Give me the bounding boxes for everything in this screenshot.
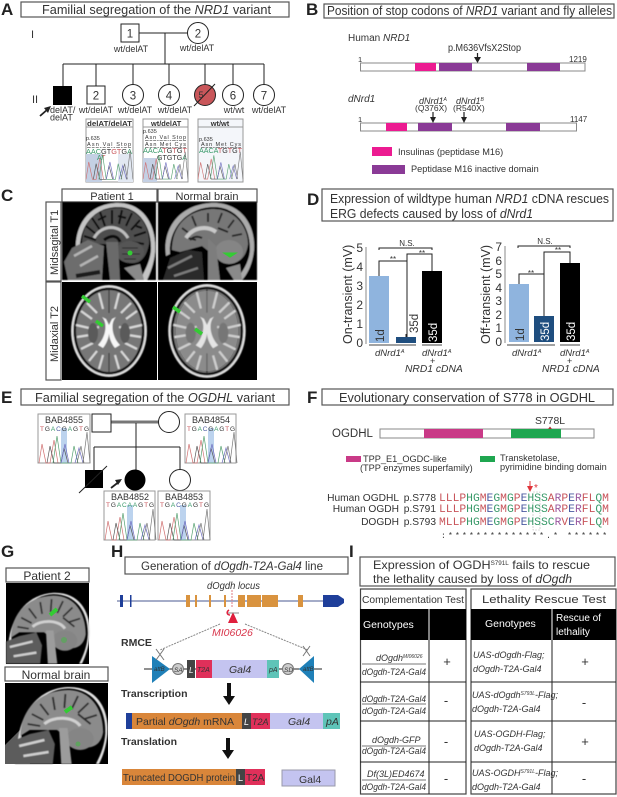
chart: on-transient: 1 xyxy=(356,317,363,331)
proband E xyxy=(111,470,146,490)
sequence alignment: LLLPHGMEGMGPEHSSARPERFLQM xyxy=(439,504,609,516)
lethality rescue table: S793L xyxy=(521,691,535,697)
chromatogram wt/delAT: GTGTGA xyxy=(157,155,187,162)
panel: D ERG rescue charts xyxy=(307,189,613,375)
individual II-2: 2 xyxy=(93,90,99,102)
mRNA bar: L xyxy=(244,717,249,727)
panel: E familial segregation of OGDHL xyxy=(1,388,289,540)
chromatogram wt/delAT: AACATGTGT xyxy=(143,148,188,155)
Gal4 bar: Gal4 xyxy=(299,774,321,786)
mRNA bar: Gal4 xyxy=(288,716,310,728)
MRI normal axial xyxy=(158,282,257,380)
translation step xyxy=(121,736,234,759)
chart: on-transient: A xyxy=(447,349,452,355)
individual II-3 xyxy=(117,84,153,115)
gene locus xyxy=(117,581,344,607)
chromatogram wt/wt: Asn Met Cys xyxy=(201,142,241,148)
MRI normal midsagittal xyxy=(158,202,257,280)
normal brain MRI: Normal brain xyxy=(22,668,90,682)
complementation table: dOgdh-T2A-Gal4 xyxy=(362,667,426,677)
fly dNrd1 protein: dNrd1 xyxy=(419,96,444,106)
sequence alignment: * xyxy=(534,483,538,494)
chart: on-transient: 1d xyxy=(375,329,387,342)
chromatogram wt/delAT: p.635 xyxy=(143,129,157,135)
complementation table: dOgdh-GFP xyxy=(372,735,421,745)
panel: A familial segregation of NRD1 xyxy=(1,0,289,182)
heading F: Evolutionary conservation of S778 in OGDHL xyxy=(339,390,595,405)
chromatogram delAT/delAT: AT xyxy=(97,155,106,162)
chart: off-transient: + xyxy=(567,356,572,366)
individual I-1: wt/delAT xyxy=(113,44,149,54)
RMCE label and cassette: T2A xyxy=(197,667,210,674)
mother xyxy=(158,412,180,432)
legend F: pyrimidine binding domain xyxy=(500,462,607,472)
chart: off-transient: 6 xyxy=(495,254,502,268)
chart: off-transient: 5 xyxy=(495,267,502,281)
fly dNrd1 protein: (R540X) xyxy=(453,103,485,113)
panel letter G: G xyxy=(1,542,14,561)
lethality rescue table: UAS-dOgdh-Flag; xyxy=(473,650,545,660)
translation step: Translation xyxy=(121,736,177,748)
OGDHL protein: OGDHL xyxy=(332,428,374,440)
fly dNrd1 protein: dNrd1 xyxy=(348,94,375,105)
RMCE label and cassette: SA xyxy=(174,667,183,674)
sequence alignment: Human OGDHL xyxy=(327,493,399,504)
individual II-2: wt/delAT xyxy=(78,105,114,115)
panel: G patient 2 MRI xyxy=(1,542,108,764)
MRI row headers xyxy=(46,202,61,380)
individual I-2: 2 xyxy=(195,28,201,40)
individual II-3: 3 xyxy=(130,90,136,102)
complementation table: dOgdh-T2A-Gal4 xyxy=(362,782,426,792)
chart: on-transient: NRD1 cDNA xyxy=(405,364,463,375)
sequence alignment: :**************.* ****** xyxy=(441,532,607,541)
complementation table: dOgdh-T2A-Gal4 xyxy=(362,694,426,704)
panel letter D: D xyxy=(307,190,319,209)
complementation table: Complementation Test xyxy=(362,594,464,606)
chromatogram delAT/delAT: p.635 xyxy=(86,136,100,142)
heading D xyxy=(322,189,613,221)
lethality rescue table: lethality xyxy=(556,627,590,638)
fly dNrd1 protein: 1 xyxy=(358,115,362,124)
proband II-1: delAT xyxy=(50,112,73,122)
chromatogram BAB4853: BAB4853 xyxy=(165,492,203,502)
chromatogram wt/delAT: Asn Met Cys xyxy=(145,142,186,148)
panel: F evolutionary conservation xyxy=(307,388,613,541)
MRI row headers: Midsagital T1 xyxy=(49,210,61,275)
panel letter I: I xyxy=(349,542,354,561)
chromatogram BAB4852: BAB4852 xyxy=(111,492,149,502)
chart: on-transient: On-transient (mV) xyxy=(341,245,355,344)
heading I: S791L xyxy=(491,561,509,567)
complementation table: dOgdh-T2A-Gal4 xyxy=(362,706,426,716)
individual II-4: 4 xyxy=(166,90,173,102)
chart: off-transient: Off-transient (mV) xyxy=(479,245,493,344)
panel letter A: A xyxy=(1,0,13,19)
legend B xyxy=(372,147,539,174)
chart: on-transient xyxy=(341,239,463,375)
chart: on-transient: dNrd1 xyxy=(375,348,401,359)
MI06026 insertion: MI06026 xyxy=(212,627,253,639)
lethality rescue table: Lethality Rescue Test xyxy=(482,594,606,606)
chart: off-transient: ** xyxy=(555,246,561,255)
chart: off-transient: 0 xyxy=(495,335,502,349)
individual II-4 xyxy=(157,84,193,115)
complementation table: Genotypes xyxy=(363,619,414,631)
complementation table: + xyxy=(443,654,451,669)
heading I: fails to rescue xyxy=(509,558,590,572)
panel letter H: H xyxy=(111,542,123,561)
RMCE label and cassette: L xyxy=(189,666,193,675)
pedigree E lines xyxy=(94,422,180,470)
truncated protein bar xyxy=(122,769,265,785)
sequence alignment: MLLPHGMEGMGPEHSSCRVERFLQM xyxy=(439,517,609,529)
human NRD1 protein: p.M636VfsX2Stop xyxy=(448,43,521,54)
chart: on-transient: 35d xyxy=(428,323,440,342)
heading D: ERG defects caused by loss of dNrd1 xyxy=(330,206,533,221)
heading H: Generation of dOgdh-T2A-Gal4 line xyxy=(141,561,323,573)
sequence alignment: p.S791 xyxy=(404,504,436,515)
individual I-2 xyxy=(179,22,215,53)
lethality rescue table: -Flag; xyxy=(535,768,558,778)
chromatogram wt/delAT: Asn Val Stop xyxy=(145,135,186,141)
MI06026 insertion xyxy=(212,610,253,639)
chart: off-transient: 7 xyxy=(495,240,502,254)
proband II-1: delAT/ xyxy=(50,105,76,115)
human NRD1 protein: 1 xyxy=(358,55,362,64)
chromatogram BAB4854 xyxy=(185,414,237,463)
heading I xyxy=(360,557,615,586)
chromatogram wt/delAT: wt/delAT xyxy=(150,119,182,128)
lethality rescue table: UAS-OGDH xyxy=(472,768,521,778)
father xyxy=(92,414,111,432)
OGDHL protein xyxy=(332,416,594,440)
lethality rescue table: dOgdh-T2A-Gal4 xyxy=(474,743,543,753)
sequence alignment: p.S778 xyxy=(404,493,436,504)
panel: C MRI grid xyxy=(1,186,257,380)
patient 2 MRI: Patient 2 xyxy=(23,569,71,583)
complementation table: dOgdh-T2A-Gal4 xyxy=(362,746,426,756)
chromatogram delAT/delAT: Asn Val Stop xyxy=(87,142,131,148)
chromatogram wt/wt: AACATGTGT xyxy=(199,148,243,155)
heading I: the lethality caused by loss of dOgdh xyxy=(373,572,572,586)
chromatogram BAB4852 xyxy=(104,491,156,540)
chromatogram delAT/delAT: delAT/delAT xyxy=(87,119,133,128)
RMCE label and cassette: attB xyxy=(154,667,165,673)
heading E: Familial segregation of the OGDHL variant xyxy=(35,390,275,405)
chart: off-transient: 1d xyxy=(515,328,527,341)
chart: on-transient: 4 xyxy=(356,260,363,274)
lethality rescue table: -Flag; xyxy=(535,690,559,700)
RMCE label and cassette xyxy=(121,624,322,683)
MRI patient 1 axial xyxy=(62,282,157,380)
complementation table: - xyxy=(444,693,448,708)
truncated protein bar: T2A xyxy=(246,773,265,784)
chart: on-transient: 35d xyxy=(409,314,421,333)
individual II-6: wt/wt xyxy=(223,105,245,115)
OGDHL protein: S778L xyxy=(535,416,565,427)
MRI column headers: Patient 1 xyxy=(90,191,134,203)
panel letter F: F xyxy=(307,388,317,407)
sequence alignment: p.S793 xyxy=(404,517,436,528)
mRNA bar: pA xyxy=(325,716,339,728)
RMCE label and cassette: pA xyxy=(268,667,278,674)
lethality rescue table: - xyxy=(582,695,586,710)
legend B: Insulinas (peptidase M16) xyxy=(398,147,503,157)
individual II-6: 6 xyxy=(230,90,236,102)
chromatogram delAT/delAT: AACGTGTGA xyxy=(86,149,132,156)
Gal4 bar xyxy=(282,770,335,786)
individual II-3: wt/delAT xyxy=(117,105,153,115)
sister xyxy=(170,470,190,490)
individual II-6 xyxy=(222,84,245,115)
chart: off-transient: dNrd1 xyxy=(560,348,586,359)
chromatogram wt/delAT xyxy=(143,119,188,182)
gene locus: dOgdh locus xyxy=(207,581,260,592)
chart: off-transient: 4 xyxy=(495,281,502,295)
sequence alignment: LLLPHGMEGMGPEHSSARPERFLQM xyxy=(439,493,609,505)
lethality rescue table: Genotypes xyxy=(485,618,536,630)
heading A: Familial segregation of the NRD1 variant xyxy=(42,2,271,17)
MRI column headers: Normal brain xyxy=(176,191,238,203)
chart: off-transient: A xyxy=(537,349,542,355)
truncated protein bar: L xyxy=(238,773,243,783)
individual II-2 xyxy=(78,86,114,115)
fly dNrd1 protein: (Q376X) xyxy=(415,103,447,113)
panel letter C: C xyxy=(1,186,13,205)
panel letter B: B xyxy=(306,0,318,19)
lethality rescue table: dOgdh-T2A-Gal4 xyxy=(472,782,541,792)
MRI row headers: Midaxial T2 xyxy=(49,306,61,362)
chromatogram BAB4854: BAB4854 xyxy=(192,415,230,425)
chart: on-transient: dNrd1 xyxy=(422,348,448,359)
panel: I tables xyxy=(349,542,616,794)
individual I-1: 1 xyxy=(127,28,133,40)
chromatogram BAB4853 xyxy=(158,491,210,540)
complementation table: Df(3L)ED4674 xyxy=(367,769,425,779)
RMCE label and cassette: Gal4 xyxy=(229,664,251,676)
heading H xyxy=(125,557,348,574)
legend F: (TPP enzymes superfamily) xyxy=(360,463,473,473)
chromatogram delAT/delAT xyxy=(86,119,133,182)
chart: on-transient: 3 xyxy=(356,279,363,293)
individual II-7: 7 xyxy=(261,90,267,102)
proband II-1 xyxy=(40,86,76,122)
deceased brother xyxy=(79,466,107,493)
chart: off-transient: 2 xyxy=(495,308,502,322)
RMCE label and cassette: attB xyxy=(303,667,314,673)
generation labels: II xyxy=(32,94,38,106)
generation labels xyxy=(31,29,38,106)
chart: off-transient: A xyxy=(585,349,590,355)
chart: on-transient: 0 xyxy=(356,336,363,350)
legend F: TPP_E1_OGDC-like xyxy=(363,454,447,464)
complementation table: MI06026 xyxy=(403,654,423,660)
chart: off-transient: N.S. xyxy=(537,237,553,246)
transcription step xyxy=(121,683,235,705)
generation labels: I xyxy=(31,29,34,41)
chart: off-transient: 35d xyxy=(540,322,552,341)
panel letter E: E xyxy=(1,388,12,407)
chart: off-transient: 35d xyxy=(566,322,578,341)
chart: off-transient: dNrd1 xyxy=(512,348,538,359)
sequence alignment: Human OGDH xyxy=(333,504,399,515)
lethality rescue table: dOgdh-T2A-Gal4 xyxy=(472,704,541,714)
chromatogram BAB4854: TGACGAGTG xyxy=(187,426,235,433)
heading I: Expression of OGDH xyxy=(373,558,485,572)
sequence alignment xyxy=(327,481,609,541)
fly dNrd1 protein: B xyxy=(481,97,485,103)
human NRD1 protein: 1219 xyxy=(569,55,587,64)
chart: on-transient: ** xyxy=(419,249,425,258)
chart: off-transient: 1 xyxy=(495,321,502,335)
transcription step: Transcription xyxy=(121,688,188,700)
RMCE label and cassette: SD xyxy=(284,667,293,674)
MRI column headers xyxy=(62,189,257,203)
lethality rescue table: UAS-dOgdh xyxy=(472,690,521,700)
normal brain MRI xyxy=(5,667,108,764)
truncated protein bar: Truncated DOGDH protein xyxy=(123,772,235,784)
chromatogram BAB4852: TGACAAGTG xyxy=(106,502,154,509)
legend B: Peptidase M16 inactive domain xyxy=(411,164,539,174)
heading B: Position of stop codons of NRD1 variant and fly alleles xyxy=(327,3,612,18)
complementation table: dOgdh xyxy=(376,653,403,663)
chromatogram BAB4855: TGACGAGTG xyxy=(40,426,89,433)
pedigree lines xyxy=(63,33,264,86)
human NRD1 protein: Human NRD1 xyxy=(348,33,410,44)
mRNA bar: T2A xyxy=(252,717,269,727)
chart: on-transient: + xyxy=(430,356,435,366)
MRI patient 1 midsagittal xyxy=(62,202,156,280)
chromatogram BAB4853: TGACGAGTG xyxy=(160,502,209,509)
individual II-4: wt/delAT xyxy=(157,105,193,115)
lethality rescue table: Rescue of xyxy=(556,613,601,624)
patient 2 MRI xyxy=(6,568,90,664)
chart: on-transient: 5 xyxy=(356,241,363,255)
lethality rescue table: S791L xyxy=(521,769,535,775)
chromatogram wt/wt: p.635 xyxy=(199,137,213,143)
complementation table: - xyxy=(444,771,448,786)
mRNA bar: Partial dOgdh mRNA xyxy=(136,716,234,728)
lethality rescue table: UAS-OGDH-Flag; xyxy=(474,729,546,739)
chromatogram wt/wt: wt/wt xyxy=(210,119,230,128)
lethality rescue table: + xyxy=(581,654,589,669)
individual I-2: wt/delAT xyxy=(179,43,215,53)
human NRD1 protein xyxy=(348,33,587,71)
chart: on-transient: 2 xyxy=(356,298,363,312)
chart: on-transient: N.S. xyxy=(399,239,415,248)
individual II-5 deceased xyxy=(194,84,216,106)
fly dNrd1 protein: A xyxy=(443,97,448,103)
lethality rescue table: - xyxy=(582,771,586,786)
complementation table: - xyxy=(444,734,448,749)
mRNA bar xyxy=(126,713,340,729)
chart: off-transient xyxy=(479,237,600,375)
chart: off-transient: ** xyxy=(528,269,534,278)
complementation table xyxy=(360,589,466,794)
legend F xyxy=(346,453,607,473)
individual II-5 deceased: 5 xyxy=(198,90,204,100)
panel: H generation of line xyxy=(111,542,348,786)
legend F: Transketolase, xyxy=(500,453,560,463)
chromatogram BAB4855 xyxy=(38,414,90,463)
lethality rescue table: + xyxy=(581,734,589,749)
chart: off-transient: NRD1 cDNA xyxy=(542,364,600,375)
fly dNrd1 protein xyxy=(348,94,588,131)
sequence alignment: DOGDH xyxy=(361,517,399,528)
RMCE label and cassette: RMCE xyxy=(121,637,152,649)
panel: B position of stop codons xyxy=(306,0,614,174)
lethality rescue table: dOgdh-T2A-Gal4 xyxy=(473,664,542,674)
chromatogram BAB4855: BAB4855 xyxy=(45,415,83,425)
chart: on-transient: ** xyxy=(390,255,396,264)
chart: on-transient: A xyxy=(400,349,405,355)
heading D: Expression of wildtype human NRD1 cDNA rescues xyxy=(330,191,609,206)
individual I-1 xyxy=(113,24,149,54)
fly dNrd1 protein: dNrd1 xyxy=(456,96,481,106)
fly dNrd1 protein: 1147 xyxy=(570,115,588,124)
chart: off-transient: 3 xyxy=(495,294,502,308)
individual II-7: wt/delAT xyxy=(251,105,287,115)
lethality rescue table xyxy=(471,589,616,794)
chromatogram wt/wt xyxy=(198,119,243,182)
individual II-7 xyxy=(251,84,287,115)
